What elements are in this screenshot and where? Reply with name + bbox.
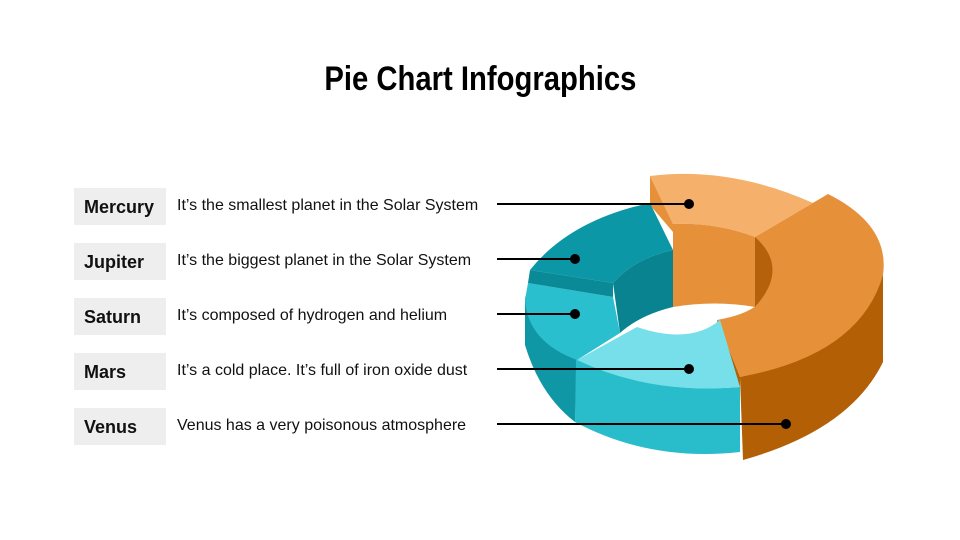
label: Mercury	[74, 188, 166, 225]
label: Saturn	[74, 298, 166, 335]
desc: Venus: Venus has a very poisonous atmosphere	[177, 417, 466, 434]
title: Pie Chart Infographics	[324, 60, 636, 98]
label: Jupiter: Jupiter	[84, 252, 144, 272]
label: Jupiter	[74, 243, 166, 280]
label: Mars: Mars	[84, 362, 126, 382]
desc: Mercury: It’s the smallest planet in the Solar System	[177, 197, 478, 214]
label: Mars	[74, 353, 166, 390]
connector lines and dots	[497, 200, 790, 428]
desc: Saturn: It’s composed of hydrogen and helium	[177, 307, 447, 324]
label: Venus: Venus	[84, 417, 137, 437]
desc: Jupiter: It’s the biggest planet in the Solar System	[177, 252, 471, 269]
label: Saturn: Saturn	[84, 307, 141, 327]
desc: Mars: It’s a cold place. It’s full of iron oxide dust	[177, 362, 467, 379]
label: Mercury: Mercury	[84, 197, 154, 217]
label: Venus	[74, 408, 166, 445]
